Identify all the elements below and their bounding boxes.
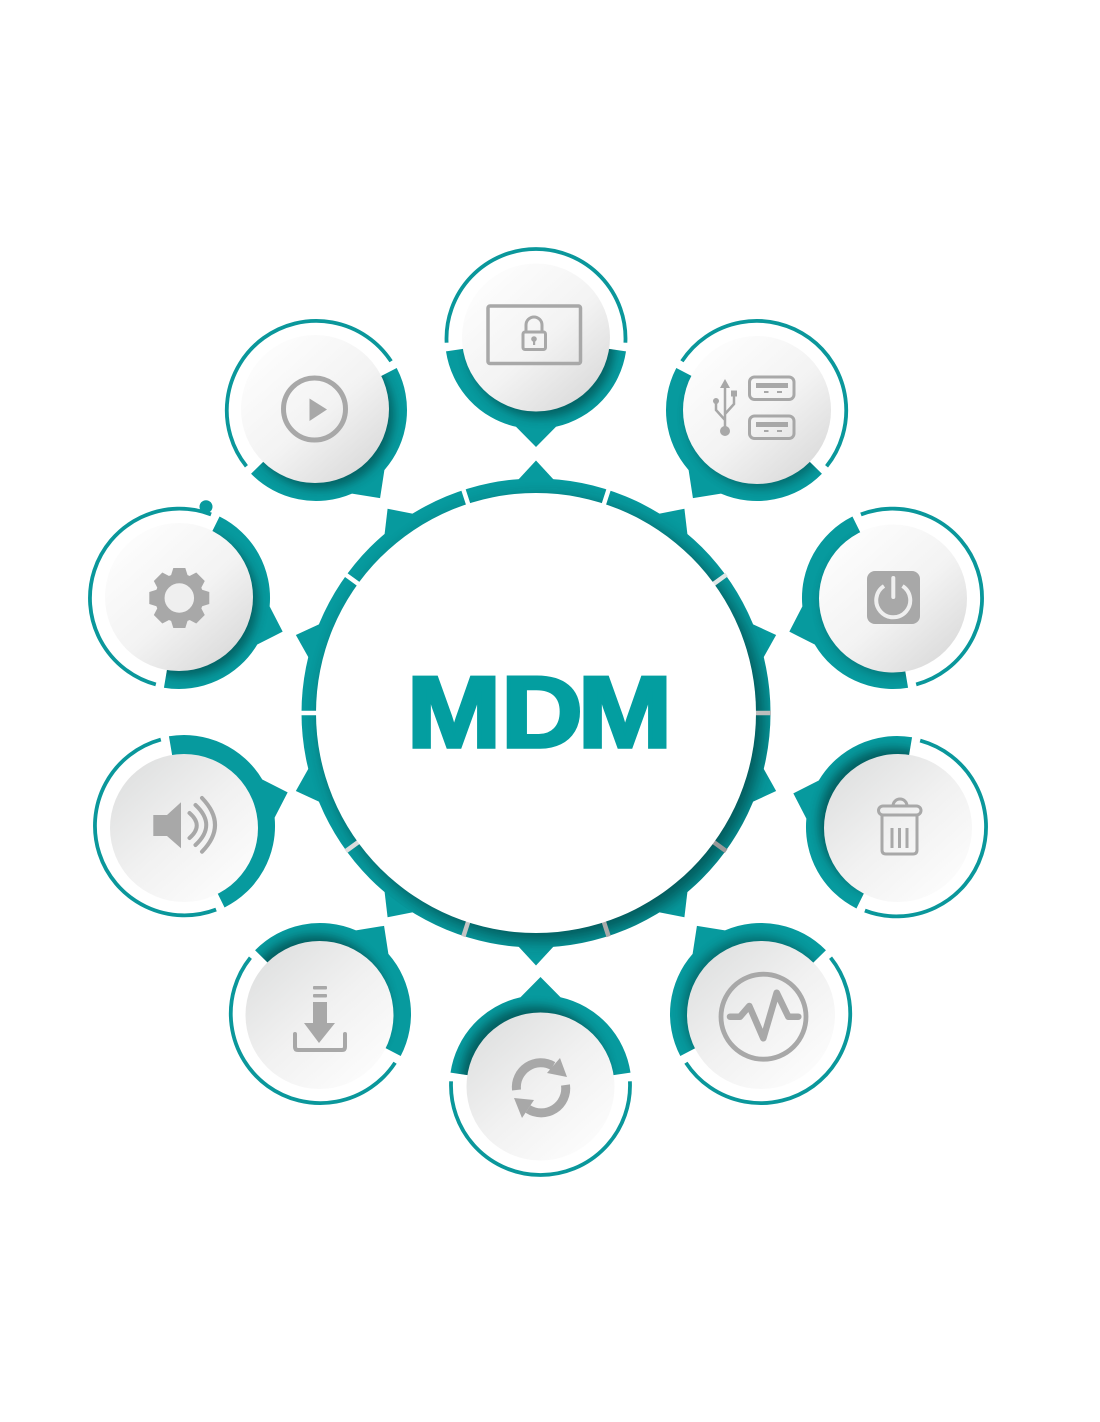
central hub: [290, 460, 782, 966]
hub ring with pointers: [290, 460, 782, 966]
icon: play button: [284, 378, 346, 440]
icon: trash can: [878, 799, 921, 854]
icon: locked screen: [488, 306, 580, 364]
node: settings: [88, 500, 283, 689]
node: screen lock: [446, 249, 626, 447]
icon: gear: [149, 568, 209, 628]
icon: speaker: [153, 798, 215, 852]
node: activity monitor: [670, 923, 852, 1105]
hub disc: [316, 493, 756, 933]
node: trash: [793, 736, 988, 918]
node: sync: [450, 977, 630, 1175]
icon: pulse: [721, 974, 806, 1059]
knob dot: [200, 500, 212, 513]
icon: sync arrows: [514, 1058, 567, 1118]
node: download: [228, 923, 411, 1105]
node: power: [789, 506, 984, 689]
title: MDM: MDM: [407, 656, 672, 769]
node: play: [224, 319, 407, 501]
icon: USB symbol and ports: [713, 377, 794, 438]
node: USB ports: [666, 319, 848, 501]
icon: download arrow: [295, 986, 345, 1050]
icon: power button: [867, 571, 920, 624]
node: sound: [72, 707, 315, 939]
